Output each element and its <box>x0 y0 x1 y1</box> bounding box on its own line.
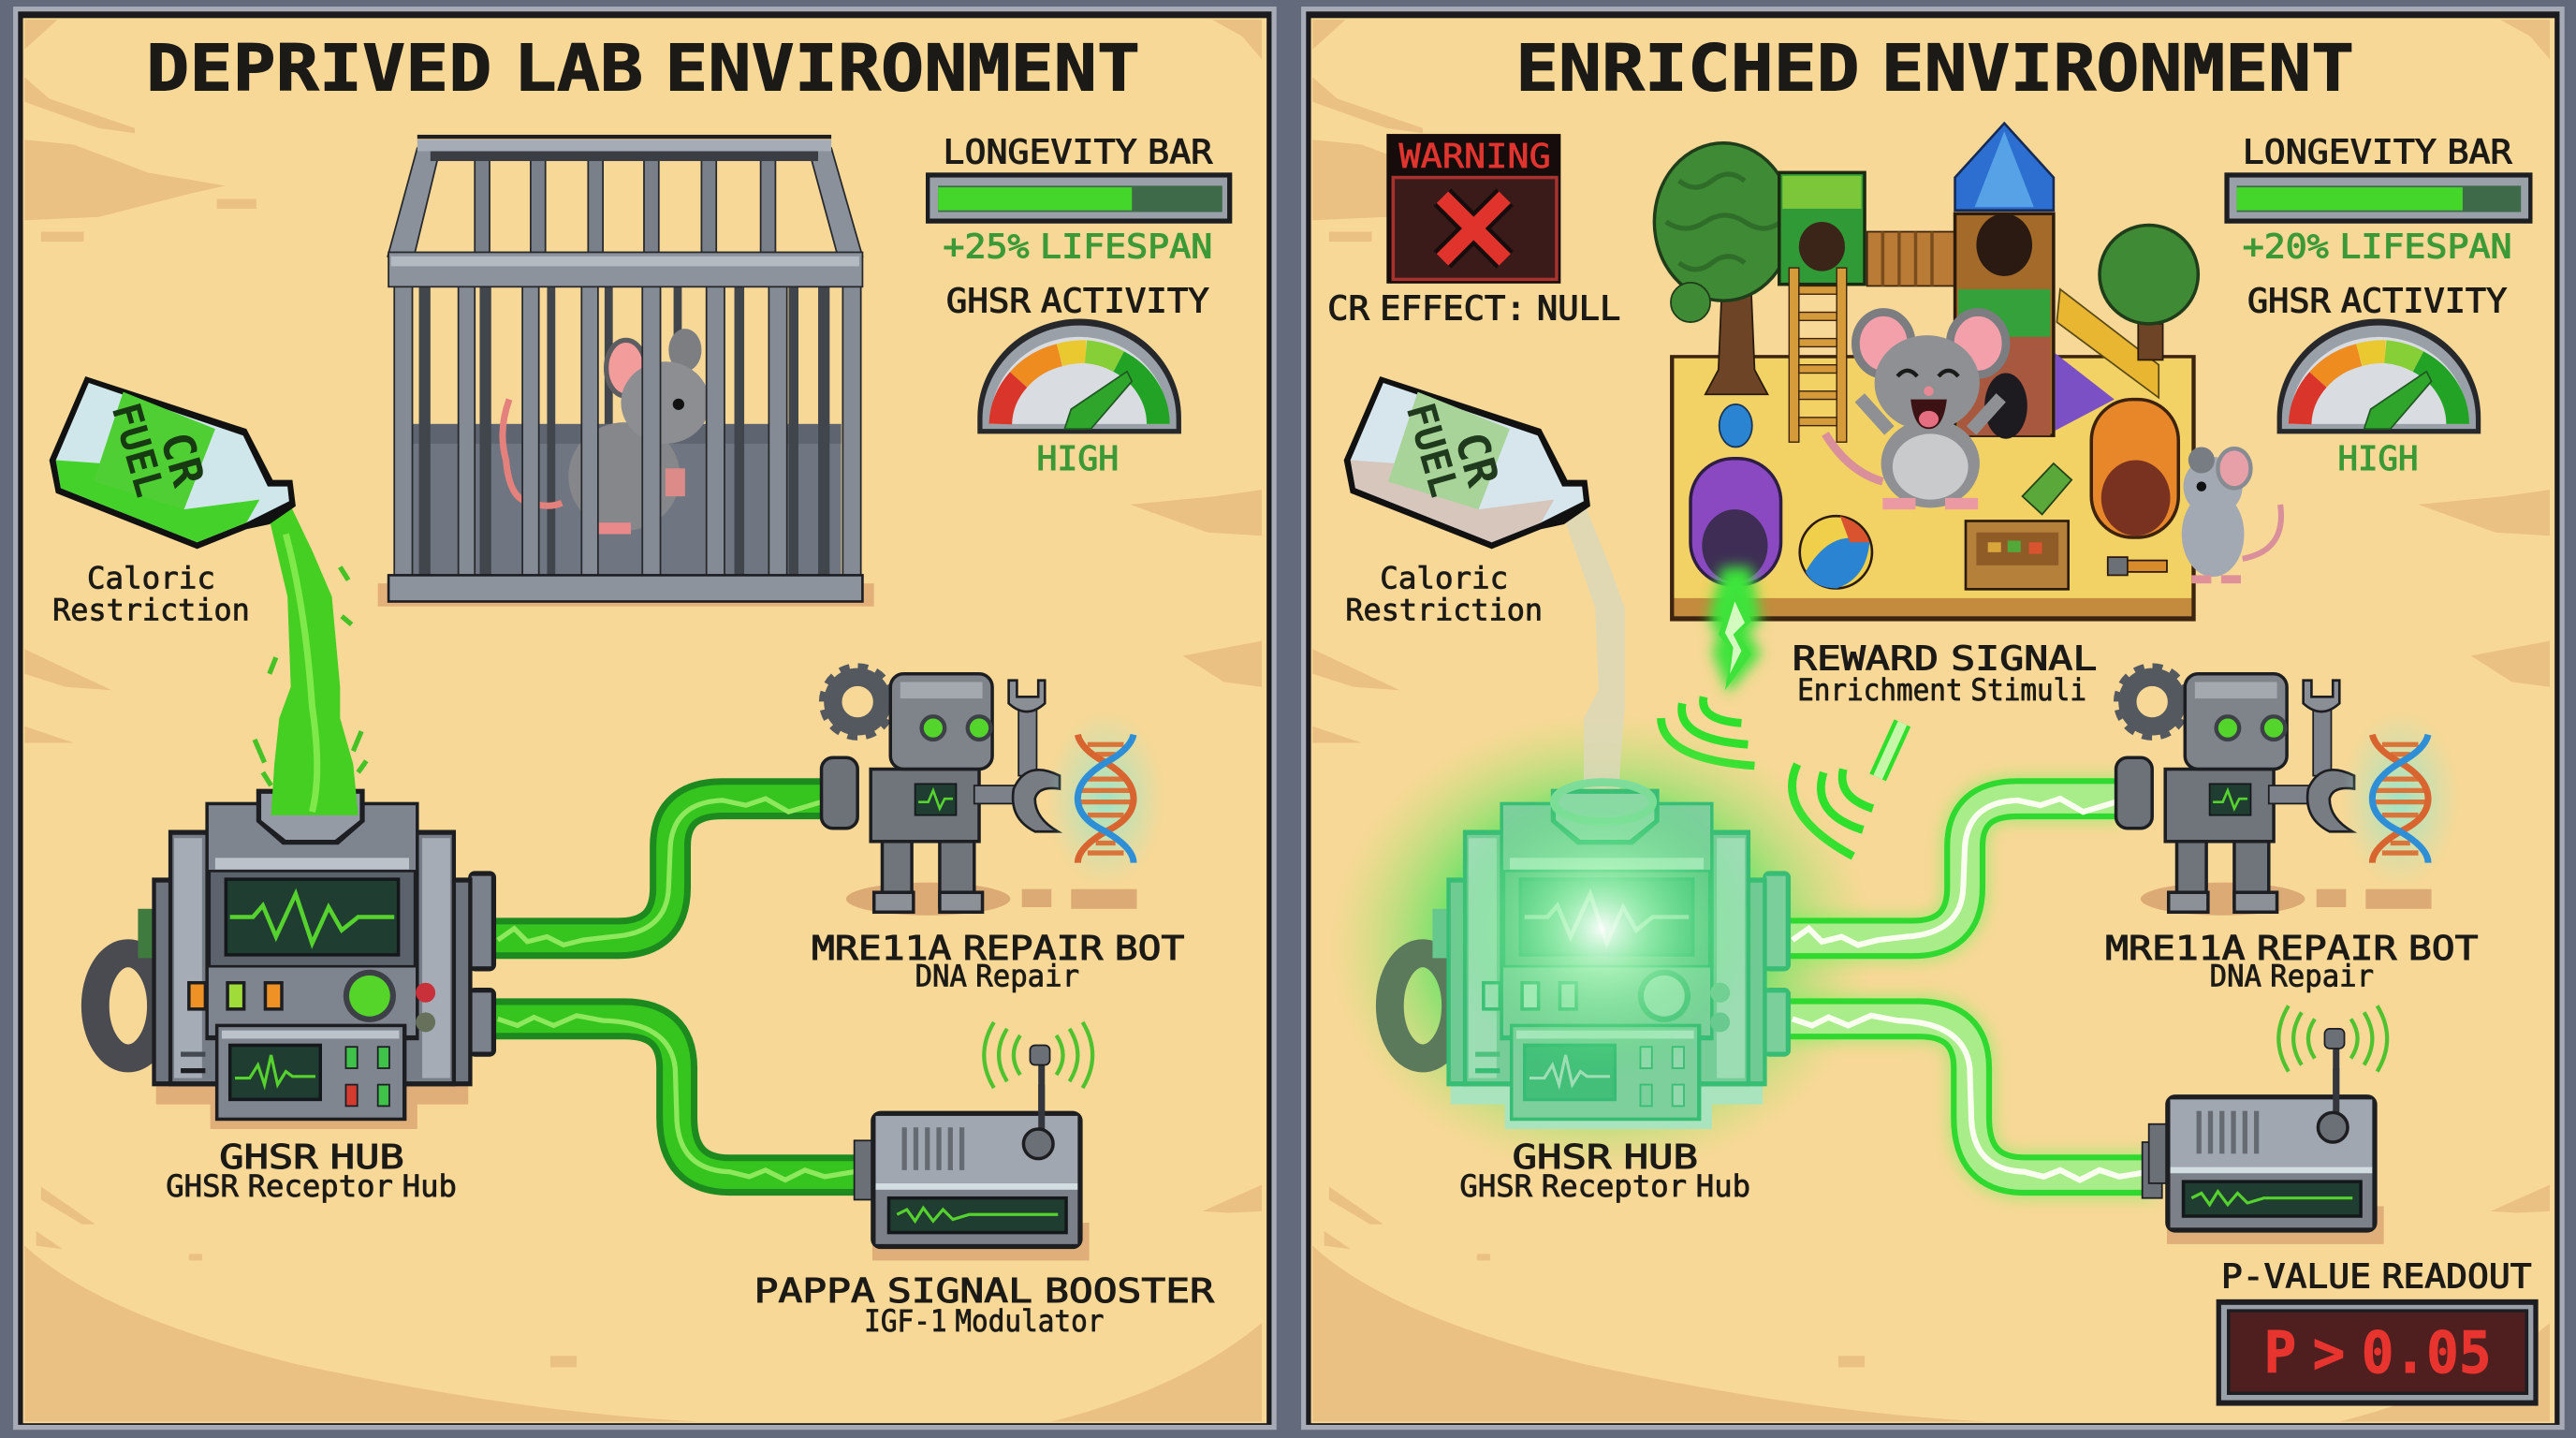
toy box <box>1966 521 2069 589</box>
pipe: hub to signal booster, glowing <box>1788 1016 2156 1180</box>
icon: CR fuel bottle: FUEL <box>103 398 173 502</box>
warning caption: CR EFFECT: NULL <box>1327 289 1620 328</box>
booster label: IGF-1 Modulator <box>864 1305 1104 1339</box>
title: ENRICHED ENVIRONMENT <box>1515 32 2354 107</box>
green tower <box>1779 172 1865 285</box>
icon: signal booster <box>2149 1005 2387 1244</box>
warning sign <box>1386 134 1560 284</box>
bottle label: Caloric <box>1380 562 1508 595</box>
bottle label <box>1345 562 1543 628</box>
icon: wire cage with mouse <box>378 135 874 607</box>
happy mouse <box>1825 313 2006 509</box>
bot label: DNA Repair <box>2210 960 2374 993</box>
panel: enriched environment <box>1301 7 2565 1430</box>
bot label: MRE11A REPAIR BOT <box>2105 930 2479 968</box>
reward signal label <box>1793 639 2097 708</box>
booster connector <box>2143 1142 2162 1198</box>
longevity label: LONGEVITY BAR <box>2243 134 2512 172</box>
yellow slide <box>2056 289 2159 398</box>
booster label <box>754 1272 1214 1339</box>
reward signal bolt <box>1708 567 1761 694</box>
p-value label: P-VALUE READOUT <box>2221 1258 2532 1297</box>
caged mouse <box>503 329 710 535</box>
bottle label: Caloric <box>87 562 215 595</box>
icon: signal booster <box>855 1022 1092 1260</box>
icon: repair bot with DNA <box>2116 668 2459 916</box>
bottle label <box>52 562 250 628</box>
purple tunnel <box>1690 459 1781 585</box>
title: DEPRIVED LAB ENVIRONMENT <box>146 32 1140 107</box>
gauge: high <box>977 319 1181 433</box>
small tree <box>2100 225 2198 360</box>
panel: deprived lab environment <box>13 7 1277 1430</box>
pipe: hub to repair bot, glowing <box>1788 799 2123 945</box>
pipe: hub to repair bot <box>493 799 825 945</box>
booster label: PAPPA SIGNAL BOOSTER <box>754 1272 1214 1311</box>
icon: pale CR fuel bottle: FUEL <box>1398 398 1468 502</box>
bridge <box>1867 232 1955 286</box>
bot label <box>2105 930 2479 993</box>
p-value readout: P > 0.05 <box>2264 1320 2492 1387</box>
bot label <box>812 930 1184 993</box>
beach ball <box>1800 516 1872 588</box>
hub central glow <box>1445 781 1758 1077</box>
glow behind hub <box>1331 715 1873 1175</box>
longevity bar <box>2224 172 2532 224</box>
hub intake ring <box>1554 783 1653 822</box>
lifespan value: +25% LIFESPAN <box>943 228 1212 267</box>
gauge value: HIGH <box>1036 440 1119 478</box>
purple ramp <box>2056 353 2115 431</box>
bot label: MRE11A REPAIR BOT <box>812 930 1184 968</box>
pour stream: green fuel <box>255 506 366 815</box>
gauge: high <box>2277 319 2481 433</box>
hub label: GHSR Receptor Hub <box>1459 1170 1750 1204</box>
pipe: hub to signal booster <box>493 1016 857 1180</box>
scene: enrichment playground <box>1654 124 2281 622</box>
hub label: GHSR Receptor Hub <box>166 1170 457 1204</box>
blue tower <box>1955 124 2054 439</box>
gauge value: HIGH <box>2338 440 2419 478</box>
warning sign: WARNING <box>1398 138 1551 176</box>
p-value readout <box>2217 1299 2539 1406</box>
small companion mouse <box>2182 447 2281 583</box>
stat: longevity label: LONGEVITY BAR <box>943 134 1213 172</box>
ladder <box>1789 268 1847 442</box>
icon: CR fuel bottle <box>50 376 296 549</box>
hub label: GHSR HUB <box>1513 1138 1698 1177</box>
icon: CR fuel bottle: CR <box>150 427 213 492</box>
reward signal waves <box>1661 697 1902 857</box>
longevity bar <box>926 172 1232 224</box>
icon: repair bot with DNA <box>822 668 1164 916</box>
blue droplet <box>1720 404 1752 447</box>
ghsr activity label: GHSR ACTIVITY <box>946 283 1209 321</box>
reward signal label: REWARD SIGNAL <box>1793 639 2097 678</box>
bot label: DNA Repair <box>915 960 1079 993</box>
hub label <box>166 1138 457 1204</box>
lifespan value: +20% LIFESPAN <box>2243 228 2512 267</box>
playground base <box>1670 355 2196 622</box>
bottle label: Restriction <box>1345 594 1543 628</box>
icon: hub coil <box>95 953 161 1058</box>
reward signal label: Enrichment Stimuli <box>1797 674 2086 708</box>
big tree <box>1654 143 1793 394</box>
hub label: GHSR HUB <box>219 1138 404 1177</box>
icon: GHSR hub, activated <box>1432 789 1791 1129</box>
bottle label: Restriction <box>52 594 250 628</box>
pour stream: pale depleted fuel <box>1562 506 1625 789</box>
orange tunnel <box>2091 400 2178 537</box>
icon: hub coil, tinted <box>1390 953 1456 1058</box>
icon: pale CR fuel bottle <box>1344 376 1590 549</box>
toy wrench <box>2108 557 2167 575</box>
green toy stick <box>2023 463 2071 514</box>
hub label <box>1459 1138 1750 1204</box>
icon: GHSR hub machine <box>138 789 496 1129</box>
ghsr activity label: GHSR ACTIVITY <box>2247 283 2507 321</box>
icon: pale CR fuel bottle: CR <box>1444 427 1508 492</box>
